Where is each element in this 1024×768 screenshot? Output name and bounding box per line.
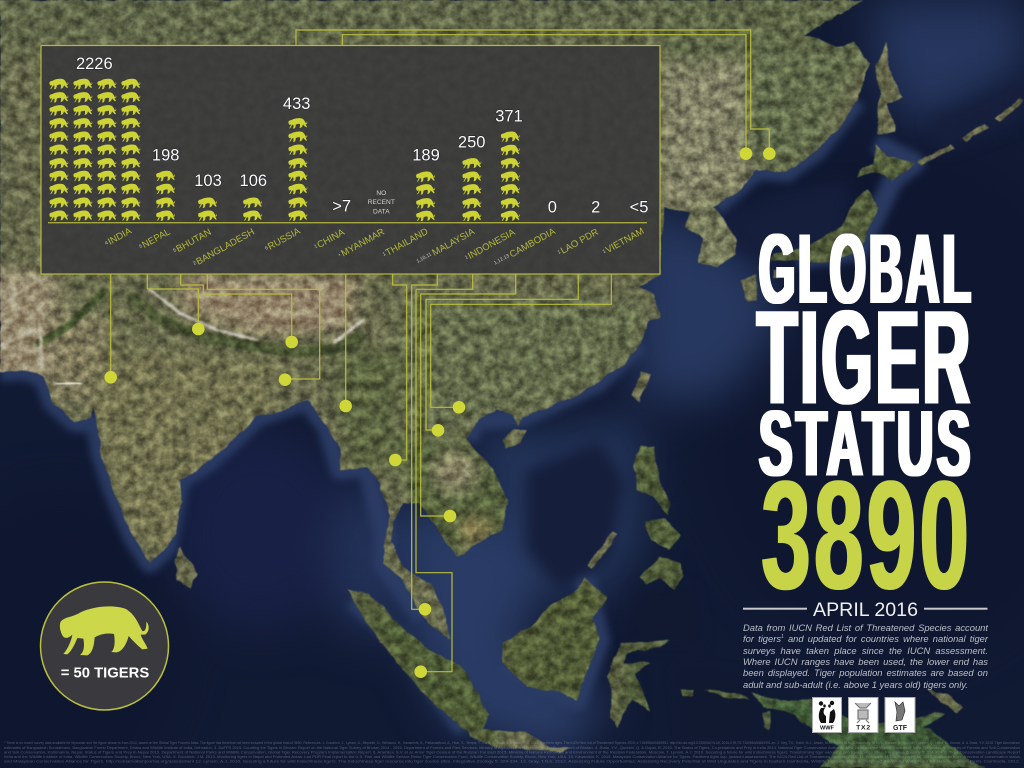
coastal shallows [0, 100, 915, 730]
chart baseline [48, 222, 647, 223]
footnotes and references: and Malaysian Conservation Alliance for Tigers. http://conservationjournal.org/assessment 12. Lynam, A.J. 2010. Securing a future for wild Indochinese tigers. The Indochinese tiger resource into tiger source sites. Integrative Zoology 5: 324-334. 13. Gray, T.N.E. 2012. Assessing Future Opportunities: Assessing Recovery Potential of Wild Ungulates and Tigers in Eastern Cambodia, Wildlife Conservation Society and the World Wide Fund for Nature, Phnom Penh, Cambodia, 2012. [4, 760, 1020, 764]
column: Bhutan 103: 103 [194, 172, 222, 190]
text block: data source note: Data from IUCN Red List of Threatened Species account [743, 622, 988, 633]
country labels: INDONESIA [466, 227, 518, 262]
value: Myanmar no recent data: RECENT [368, 199, 395, 206]
country labels: THAILAND [384, 226, 430, 259]
panel background [41, 46, 660, 274]
footnotes and references: estimates of Bangladesh Sundarbans. Bangladesh Forest Department, Dhaka and Wildlife Institute of India, Dehradun. 3. DoFPS 2015. Counting the Tigers in Bhutan: Report on the National Tiger Survey of Bhutan 2014 - 2015. Department of Forests and Park Services, Ministry of Agriculture and Forests, Royal Government of Bhutan. 4. Jhala, Y.V., Qureshi, Q. & Gopal, R. 2015. The Status of Tigers, Co-predators and Prey in India 2014. National Tiger Conservation Authority, New Delhi and the Wildlife Institute of India, Dehradun. 5. Ministry of Forests and Soil Conservation [4, 746, 1020, 750]
title [757, 213, 974, 496]
country labels: 1 [382, 251, 387, 258]
connector: Bangladesh [207, 274, 320, 386]
country labels: 1,10,11 [416, 251, 433, 265]
column: Thailand 189: 189 [412, 147, 440, 165]
column: Russia 433: 433 [283, 95, 310, 113]
country labels [103, 225, 646, 269]
footnotes and references: India and the Wildlife Institute of India. Wildlife Conservation Society, Bronx, New York, USA. 9. Goodrich, J.M. 2013. Monitoring tigers in Nepal and Protected Areas. Lao PDR Final report to the U.S. Fish and Wildlife Service Rhino Tiger Conservation Fund, Wildlife Conservation Society, Bronx, New York, USA. 10. Kawanishi, K. 2015. Malaysian Conservation Alliance for Tigers, Panthera tigris ssp. jacksoni assessment. The IUCN Red List of Threatened Species, 2015. 11. Wibisono, H.T. & Pusparini, W. 2010. Sumatran tiger: A review of conservation status [4, 755, 1020, 759]
connector: India [104, 274, 117, 384]
connector: Lao PDR [426, 274, 578, 437]
value: Vietnam <5: <5 [630, 199, 648, 217]
text block: data source note: Where IUCN ranges have been used, the lower end has [743, 656, 988, 667]
panel: tiger population pictogram chart [41, 46, 660, 274]
footnotes and references: and Soil Conservation, Kathmandu, Nepal. Status of Tigers and Prey in Nepal 2013. Department of National Parks and Wildlife Conservation, Global Tiger Recovery Program Implementation Report. 6. Aramilev, S.V. et al. Amur Tiger Census of the Russian Far East 2015, Ministry of Natural Resources and Environment of the Russian Federation. Moscow. 7. Lynam, A.J. 2010. Securing a future for wild Indochinese tigers: Transforming tiger vacuums into tiger source sites. Integrative Zoology 5: 324-334. 8. Tiger Conservation Landscape Report [4, 750, 1020, 754]
country labels: 1 [557, 249, 562, 256]
connector: Malaysia [412, 274, 437, 616]
text block: data source note: for tigers1 and updated for countries where national tiger [743, 633, 988, 644]
connector: Indonesia [414, 274, 473, 678]
country labels: INDIA [106, 225, 134, 248]
footnotes and references [4, 741, 1020, 764]
country labels: RUSSIA [266, 226, 303, 253]
country labels: 1,12,13 [493, 253, 511, 266]
country labels: MALAYSIA [430, 226, 477, 259]
value: Myanmar no recent data [368, 190, 395, 215]
column: India 2226 [49, 55, 140, 221]
country labels: 1 [464, 254, 470, 261]
legend text: = 50 TIGERS [61, 665, 149, 681]
country labels: * [338, 253, 342, 259]
country labels: 1 [602, 248, 607, 255]
column: Bangladesh 106 [240, 172, 267, 221]
country labels: BHUTAN [174, 227, 213, 255]
connector: Bhutan [181, 274, 298, 348]
column: Malaysia 250 [458, 134, 485, 221]
connector: China [342, 35, 752, 160]
value: Lao PDR 2: 2 [591, 199, 600, 217]
country labels: 6 [264, 245, 270, 252]
text block: data source note: adult and sub-adult (i.e. above 1 years old) tigers only. [743, 679, 968, 690]
column: Nepal 198 [152, 147, 179, 221]
column: Thailand 189 [412, 147, 440, 221]
value: Cambodia 0: 0 [548, 199, 557, 217]
logo: WWF: WWF [820, 726, 835, 732]
connector: Myanmar [339, 274, 352, 412]
country labels: 5 [172, 247, 178, 254]
value: Myanmar no recent data: DATA [373, 208, 390, 215]
country labels: NEPAL [140, 227, 172, 251]
value: China >7: >7 [332, 198, 351, 216]
column: Indonesia 371: 371 [495, 107, 523, 125]
country labels: CHINA [315, 227, 347, 251]
connector: Cambodia [421, 274, 516, 522]
country labels: CAMBODIA [508, 226, 558, 260]
country labels: 4 [104, 240, 110, 247]
legend: one tiger equals 50 tigers [40, 582, 168, 710]
column: India 2226: 2226 [76, 55, 113, 73]
country labels: LAO PDR [559, 227, 601, 257]
logo: TX2: TX2 [856, 724, 871, 732]
icon: tiger silhouette [60, 606, 149, 655]
country labels: MYANMAR [339, 226, 387, 259]
country labels: 1 [313, 243, 319, 250]
date heading: April 2016: APRIL 2016 [813, 599, 918, 621]
value: Myanmar no recent data: NO [376, 190, 386, 197]
connector: Thailand [389, 274, 407, 466]
country labels: BANGLADESH [194, 226, 257, 268]
logos [812, 698, 915, 732]
text block: data source note [743, 622, 988, 690]
text block: data source note: surveys have taken place since the IUCN assessment. [743, 645, 988, 656]
column: Bhutan 103 [194, 172, 222, 221]
connector: Russia [296, 30, 776, 160]
column: Bangladesh 106: 106 [240, 172, 267, 190]
connector: Nepal [147, 274, 205, 335]
country labels: 2 [192, 260, 198, 267]
column: Russia 433 [283, 95, 310, 221]
logo: GTF: GTF [893, 725, 908, 732]
connector: Vietnam [431, 274, 611, 414]
country labels: VIETNAM [604, 226, 646, 256]
column: Malaysia 250: 250 [458, 134, 485, 152]
country labels: 5 [138, 243, 144, 250]
column: Indonesia 371 [495, 107, 523, 221]
text block: data source note: been displayed. Tiger population estimates are based on [743, 667, 988, 678]
column: Nepal 198: 198 [152, 147, 179, 165]
connector lines and location dots [104, 30, 776, 678]
